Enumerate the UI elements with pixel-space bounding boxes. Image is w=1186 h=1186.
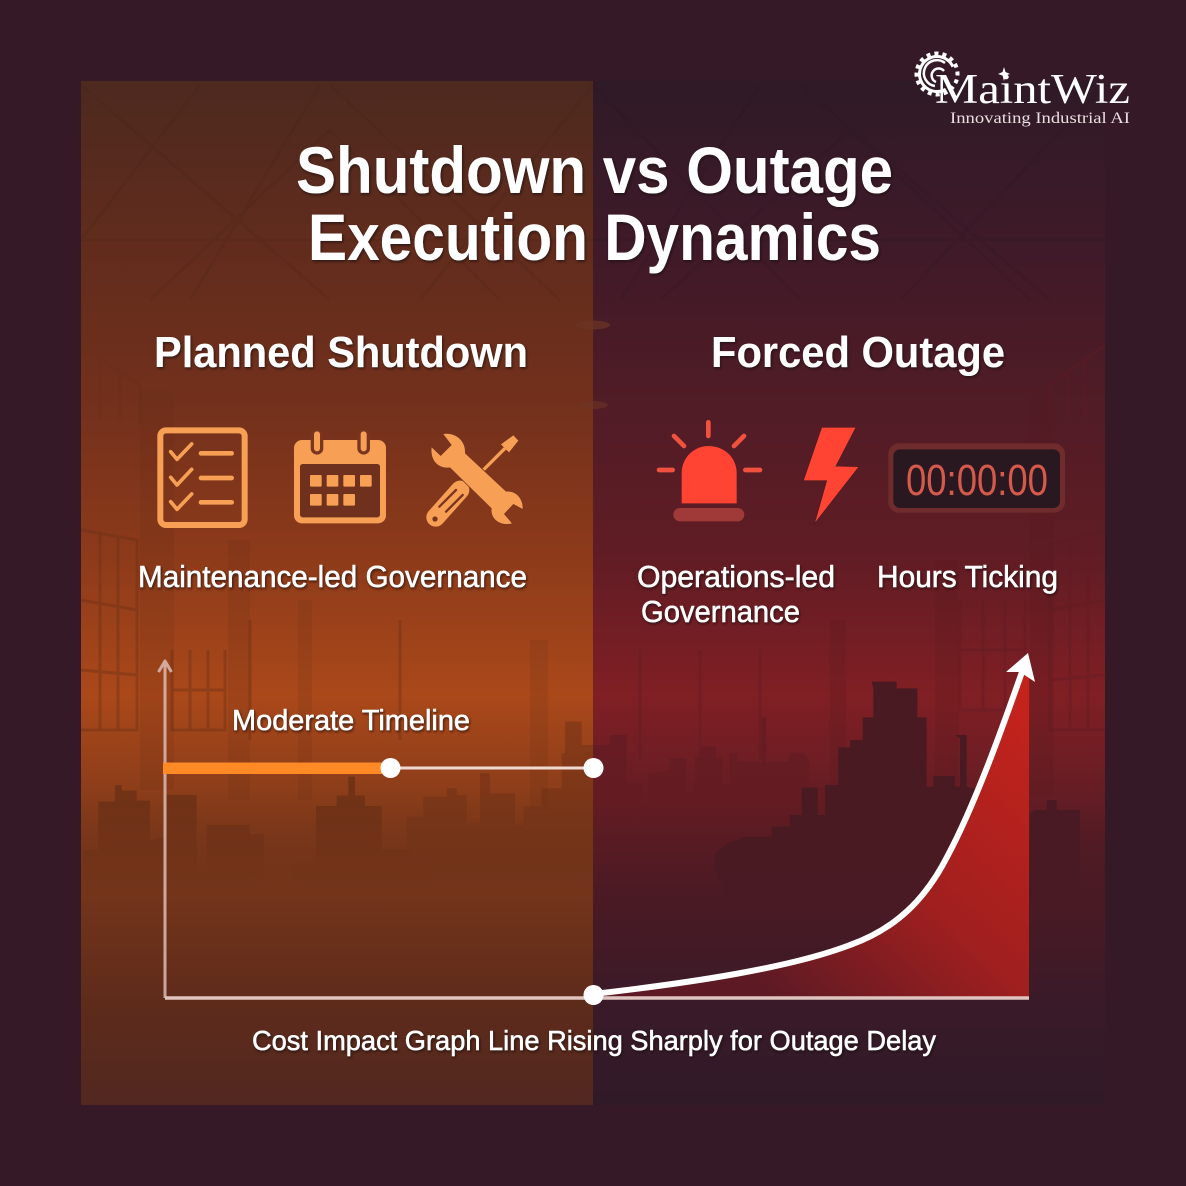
logo: MaintWiz xyxy=(909,46,1130,127)
timeline orange bar xyxy=(163,762,390,774)
arrowhead xyxy=(1006,653,1035,682)
left floor fade xyxy=(81,790,593,1105)
icon: sparkle xyxy=(998,67,1010,81)
chart: cost impact xyxy=(158,653,1035,1005)
logo wordmark: MaintWiz xyxy=(935,67,1130,113)
icon: wrench and screwdriver xyxy=(431,434,523,524)
label: hours ticking: Hours Ticking xyxy=(877,559,1058,594)
right factory skyline silhouette xyxy=(593,682,1080,973)
icon: lightning bolt xyxy=(803,427,859,524)
icon: checklist xyxy=(160,430,245,525)
label: operations-led governance: Governance xyxy=(641,594,800,629)
panel: forced outage background xyxy=(576,81,1105,1105)
timeline remainder line xyxy=(390,766,593,770)
icon: alarm beacon xyxy=(659,422,760,521)
heading: planned shutdown: Planned Shutdown xyxy=(154,328,528,377)
icon: calendar xyxy=(294,429,386,523)
heading: forced outage: Forced Outage xyxy=(711,328,1005,377)
icon: gear xyxy=(909,46,965,102)
y axis xyxy=(158,661,172,998)
title: Shutdown vs Outage xyxy=(296,133,893,207)
timeline marker: end xyxy=(584,758,604,778)
title: Execution Dynamics xyxy=(308,200,881,274)
chart area: outage cost xyxy=(593,664,1029,998)
icon: digital timer xyxy=(888,443,1065,513)
icon: digital timer: 00:00:00 xyxy=(906,457,1048,505)
right floor fade xyxy=(593,800,1105,1105)
panel: planned shutdown background xyxy=(81,81,593,1105)
x axis xyxy=(165,996,1029,1000)
timeline marker: moderate xyxy=(380,758,400,778)
cost curve xyxy=(593,672,1022,994)
title xyxy=(296,133,893,274)
label: operations-led governance: Operations-led xyxy=(637,559,835,594)
caption: cost impact: Cost Impact Graph Line Rising Sharply for Outage Delay xyxy=(252,1025,936,1056)
curve origin marker xyxy=(584,985,604,1005)
left factory skyline silhouette xyxy=(83,722,593,927)
label: operations-led governance xyxy=(637,559,835,629)
label: maintenance-led governance: Maintenance-led Governance xyxy=(138,559,527,594)
label: moderate timeline: Moderate Timeline xyxy=(232,705,470,737)
logo tagline: Innovating Industrial AI xyxy=(950,110,1130,127)
